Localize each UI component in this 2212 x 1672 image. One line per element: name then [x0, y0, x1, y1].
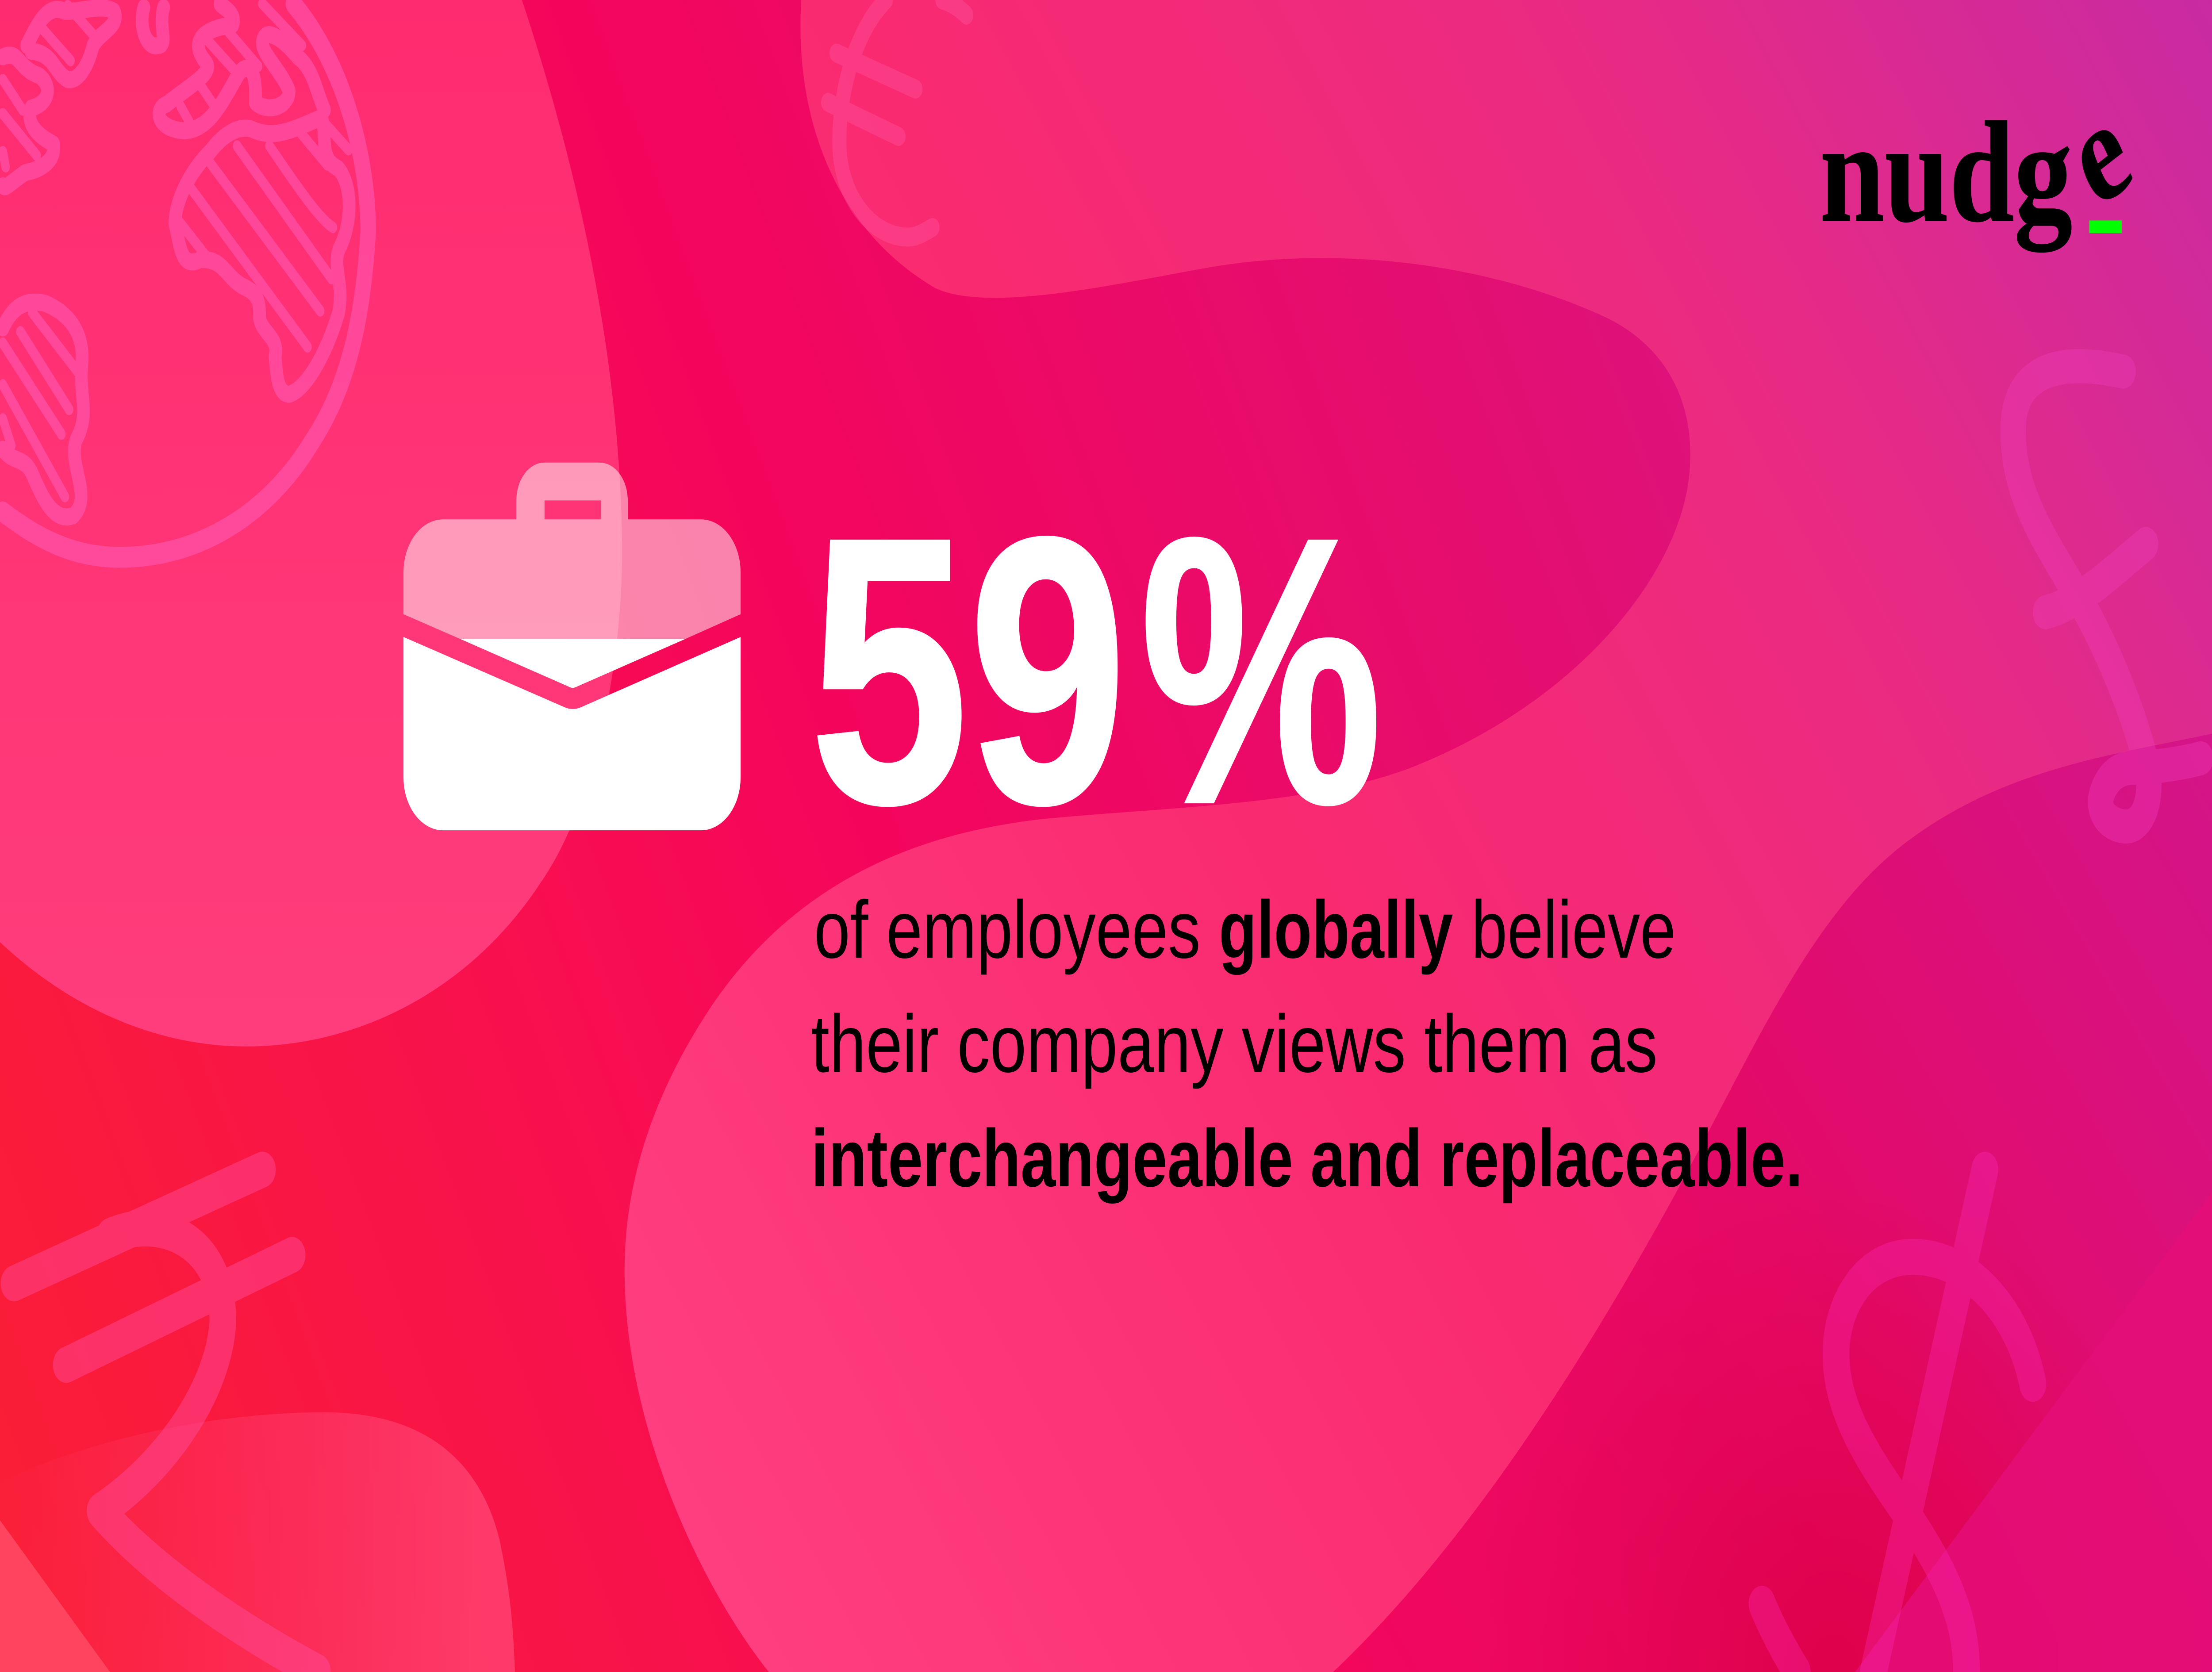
background: bottom left corner facet [0, 1520, 110, 1672]
body text: globally [1219, 884, 1453, 975]
logo: nudge [1820, 68, 2149, 254]
body text: of employees [814, 884, 1201, 975]
background blob: top left shape [0, 0, 622, 1047]
body text: their company views them as [811, 998, 1658, 1089]
big statistic: 59%: 59 [810, 459, 1127, 883]
background: lower right diagonal facet [1855, 1193, 2212, 1672]
background blob: wrapping light shape [625, 0, 2212, 1672]
body text: interchangeable and replaceable. [811, 1113, 1803, 1204]
background blob: bottom left shape [0, 1412, 515, 1672]
icon: pound symbol [2013, 366, 2200, 827]
icon: rupee symbol [14, 1170, 317, 1672]
icon: dollar symbol [1762, 1170, 2033, 1672]
big statistic: 59%: % [1140, 459, 1382, 883]
logo: nudge: e [2049, 68, 2149, 238]
body text [811, 884, 1803, 1204]
logo: nudge: nudg [1820, 92, 2072, 254]
background blob: lower right dark shape [1333, 734, 2212, 1672]
icon: globe outline drawing [3, 4, 368, 557]
icon: euro symbol [828, 0, 966, 237]
icon: briefcase [403, 463, 741, 830]
body text: believe [1471, 884, 1676, 975]
